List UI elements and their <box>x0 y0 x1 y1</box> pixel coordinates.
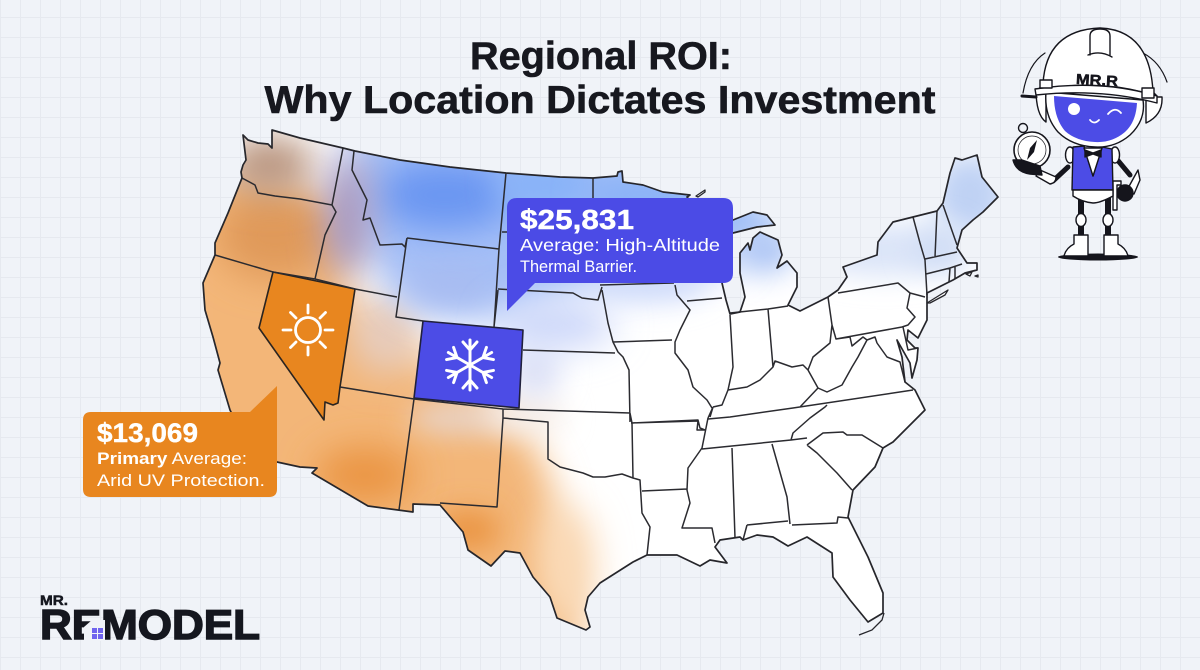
callout: high-altitude average: $25,831 <box>520 204 634 235</box>
left hand <box>1013 160 1042 175</box>
bow tie <box>1085 150 1101 157</box>
hammer <box>1113 181 1121 210</box>
face screen <box>1054 96 1137 142</box>
arms <box>1053 157 1130 181</box>
callout: arid UV protection: $13,069 <box>97 418 198 448</box>
icon: sun <box>283 305 333 355</box>
florida keys <box>859 613 884 635</box>
hat label: MR.R <box>1076 72 1119 90</box>
state: Nevada <box>259 272 355 420</box>
islands <box>696 190 978 303</box>
state outline <box>203 130 998 630</box>
ear muffs <box>1036 89 1162 123</box>
callout: arid UV protection: Primary Average: <box>97 449 247 468</box>
hard hat <box>1038 28 1157 96</box>
belt <box>1073 190 1113 203</box>
icon: snowflake <box>445 340 495 390</box>
logo: Mr. Remodel: REMODEL <box>40 601 260 648</box>
logo window <box>92 628 103 639</box>
shirt collar <box>1084 148 1102 176</box>
title: Why Location Dictates Investment <box>264 79 936 122</box>
callout: high-altitude average: Thermal Barrier. <box>520 258 637 276</box>
state borders <box>215 148 962 555</box>
callout: high-altitude average: Average: High-Altitude <box>520 235 720 255</box>
compass <box>1014 124 1050 168</box>
climate gradient fill <box>204 132 997 629</box>
state: Colorado <box>414 321 523 408</box>
head <box>1046 92 1143 147</box>
callout: arid UV protection <box>83 386 277 497</box>
callout: high-altitude average <box>507 198 733 311</box>
mascot: robot in hard hat with compass <box>1013 28 1167 260</box>
title: Regional ROI: <box>470 35 732 78</box>
shadow under boots <box>1058 254 1138 260</box>
eye <box>1068 103 1080 115</box>
callout: arid UV protection: Arid UV Protection. <box>97 471 265 490</box>
boots <box>1064 235 1128 256</box>
right hand <box>1117 185 1133 201</box>
wink and smile <box>1090 110 1121 122</box>
logo: Mr. Remodel: MR. <box>40 592 68 608</box>
map of the United States <box>170 120 1010 650</box>
title <box>264 35 936 122</box>
legs <box>1081 198 1108 240</box>
logo house cut-out <box>84 620 105 641</box>
vest <box>1072 146 1113 190</box>
